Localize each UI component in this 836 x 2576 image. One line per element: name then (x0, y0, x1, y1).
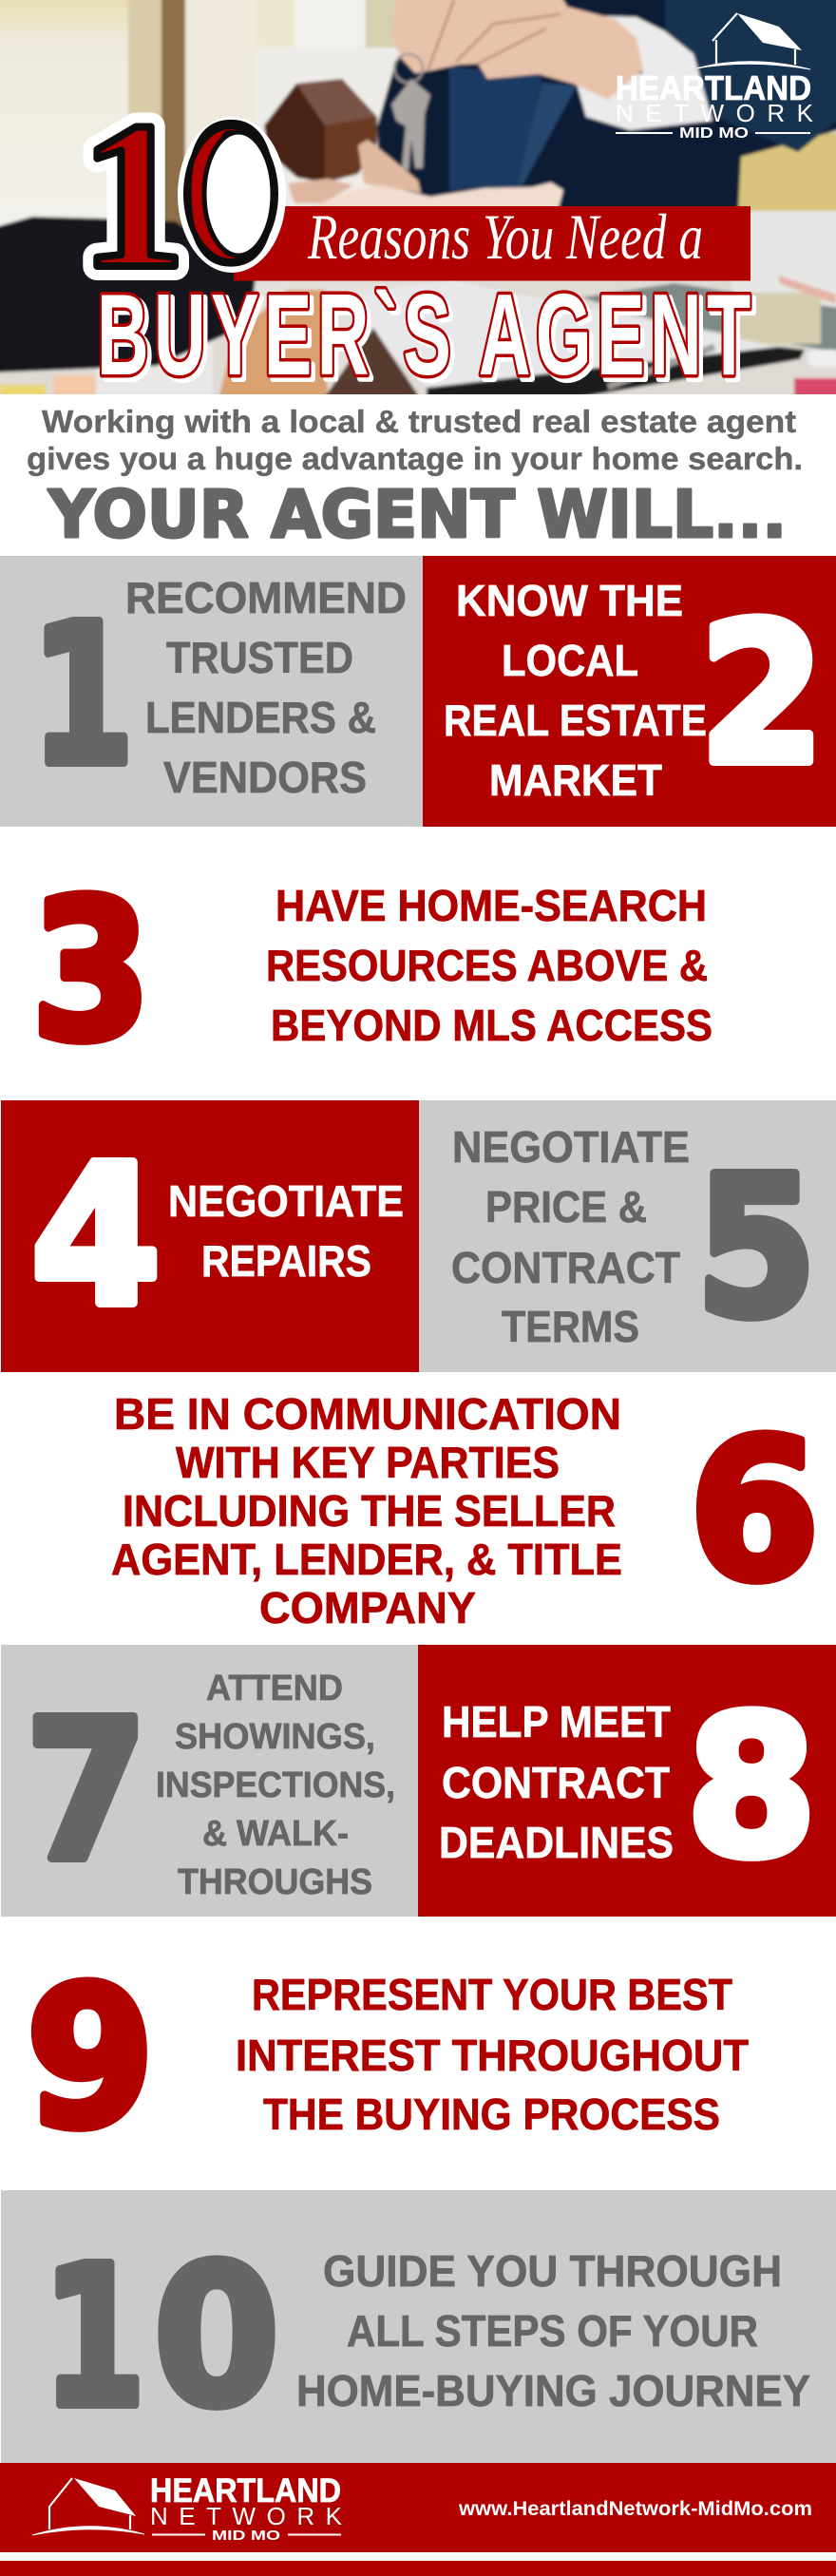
footer logo: HEARTLAND (150, 2472, 341, 2509)
panel 7: attend showings (1, 1645, 418, 1917)
panel 1: recommend lenders: LENDERS & (145, 693, 376, 742)
panel 3: home-search resources: BEYOND MLS ACCESS (271, 1001, 712, 1050)
big number 10 (80, 75, 286, 313)
panel 3: home-search resources (31, 860, 712, 1084)
panel 1: recommend lenders: VENDORS (163, 753, 367, 802)
big number 10: 1 (80, 79, 186, 313)
panel 6: communication: INCLUDING THE SELLER (123, 1486, 616, 1536)
panel 6: communication: 6 (689, 1399, 820, 1624)
panel 10: guide through journey: 1 (43, 2225, 145, 2450)
hero photo: agent handing over keys (0, 0, 836, 404)
panel 3: home-search resources: 3 (31, 860, 151, 1084)
panel 9: best interest: THE BUYING PROCESS (263, 2089, 720, 2139)
panel 6: communication: WITH KEY PARTIES (176, 1438, 560, 1487)
panel 9: best interest: 9 (27, 1946, 154, 2170)
panel 10: guide through journey: ALL STEPS OF YOUR (347, 2306, 758, 2356)
panel 8: contract deadlines: CONTRACT (442, 1758, 670, 1807)
panel 2: know the market: KNOW THE (456, 576, 683, 625)
panel 9: best interest: REPRESENT YOUR BEST (252, 1970, 732, 2019)
intro text (27, 404, 803, 476)
title banner: Reasons You Need a: Reasons You Need a (307, 200, 703, 273)
panel 5: negotiate price: 5 (695, 1135, 817, 1360)
panel 7: attend showings: THROUGHS (178, 1862, 372, 1902)
panel 6: communication: AGENT, LENDER, & TITLE (111, 1535, 622, 1584)
panel 8: contract deadlines (418, 1645, 836, 1917)
panel 1: recommend lenders (0, 556, 423, 827)
intro text: Working with a local & trusted real estate agent (42, 404, 796, 439)
panel 4: negotiate repairs: 4 (30, 1124, 162, 1349)
logo: Heartland Network Mid Mo (top right): NETWORK (616, 99, 814, 127)
title: Buyer's Agent: BUYER`S AGENT (97, 269, 750, 399)
panel 7: attend showings: & WALK- (202, 1814, 349, 1854)
panel 8: contract deadlines: 8 (686, 1675, 817, 1900)
panel 6: communication (111, 1389, 820, 1632)
heading: Your Agent Will...: YOUR AGENT WILL... (48, 477, 787, 553)
panel 5: negotiate price: CONTRACT (451, 1243, 680, 1292)
panel 5: negotiate price (419, 1100, 836, 1372)
panel 6: communication: COMPANY (259, 1583, 476, 1632)
panel 2: know the market: MARKET (489, 755, 662, 805)
panel 10: guide through journey: GUIDE YOU THROUGH (323, 2246, 782, 2296)
panel 1: recommend lenders: TRUSTED (166, 633, 353, 682)
panel 10: guide through journey: 0 (154, 2225, 279, 2450)
panel 7: attend showings: 7 (26, 1679, 147, 1903)
footer website: www.HeartlandNetwork-MidMo.com (458, 2498, 812, 2520)
panel 5: negotiate price: TERMS (502, 1302, 639, 1351)
panel 2: know the market: LOCAL (502, 636, 638, 685)
panel 4: negotiate repairs: NEGOTIATE (168, 1176, 404, 1226)
panel 4: negotiate repairs: REPAIRS (201, 1236, 371, 1286)
panel 10: guide through journey: HOME-BUYING JOURNEY (296, 2366, 810, 2415)
panel 6: communication: BE IN COMMUNICATION (114, 1389, 621, 1439)
panel 4: negotiate repairs (1, 1100, 419, 1372)
intro text: gives you a huge advantage in your home search. (27, 441, 803, 476)
panel 8: contract deadlines: DEADLINES (439, 1818, 674, 1867)
panel 7: attend showings: ATTEND (206, 1669, 343, 1708)
panel 3: home-search resources: HAVE HOME-SEARCH (276, 881, 707, 930)
panel 10: guide through journey (1, 2190, 836, 2463)
big number 10: 1 (80, 79, 186, 313)
panel 7: attend showings: SHOWINGS, (175, 1717, 375, 1757)
panel 2: know the market: REAL ESTATE (444, 696, 707, 745)
footer band (0, 2463, 836, 2576)
panel 5: negotiate price: NEGOTIATE (452, 1122, 690, 1172)
panel 8: contract deadlines: HELP MEET (442, 1697, 671, 1746)
big number 10: 0 (181, 75, 280, 309)
logo: Heartland Network Mid Mo (top right) (616, 13, 814, 142)
panel 5: negotiate price: PRICE & (485, 1182, 647, 1231)
logo: Heartland Network Mid Mo (top right): HEARTLAND (616, 68, 811, 107)
title: Buyer's Agent: BUYER`S AGENT (101, 273, 754, 403)
footer logo: MID MO (212, 2528, 280, 2544)
panel 7: attend showings: INSPECTIONS, (156, 1765, 395, 1805)
title banner: Reasons You Need a (234, 200, 750, 281)
panel 1: recommend lenders: 1 (31, 583, 134, 808)
panel 9: best interest (27, 1946, 749, 2170)
panel 9: best interest: INTEREST THROUGHOUT (236, 2031, 749, 2080)
panel 3: home-search resources: RESOURCES ABOVE & (266, 941, 708, 990)
footer logo: NETWORK (150, 2502, 343, 2530)
panel 2: know the market: 2 (699, 583, 825, 808)
panel 1: recommend lenders: RECOMMEND (125, 573, 407, 622)
logo: Heartland Network Mid Mo (top right): MID MO (679, 125, 749, 142)
footer logo (32, 2472, 343, 2544)
panel 2: know the market (423, 556, 836, 827)
